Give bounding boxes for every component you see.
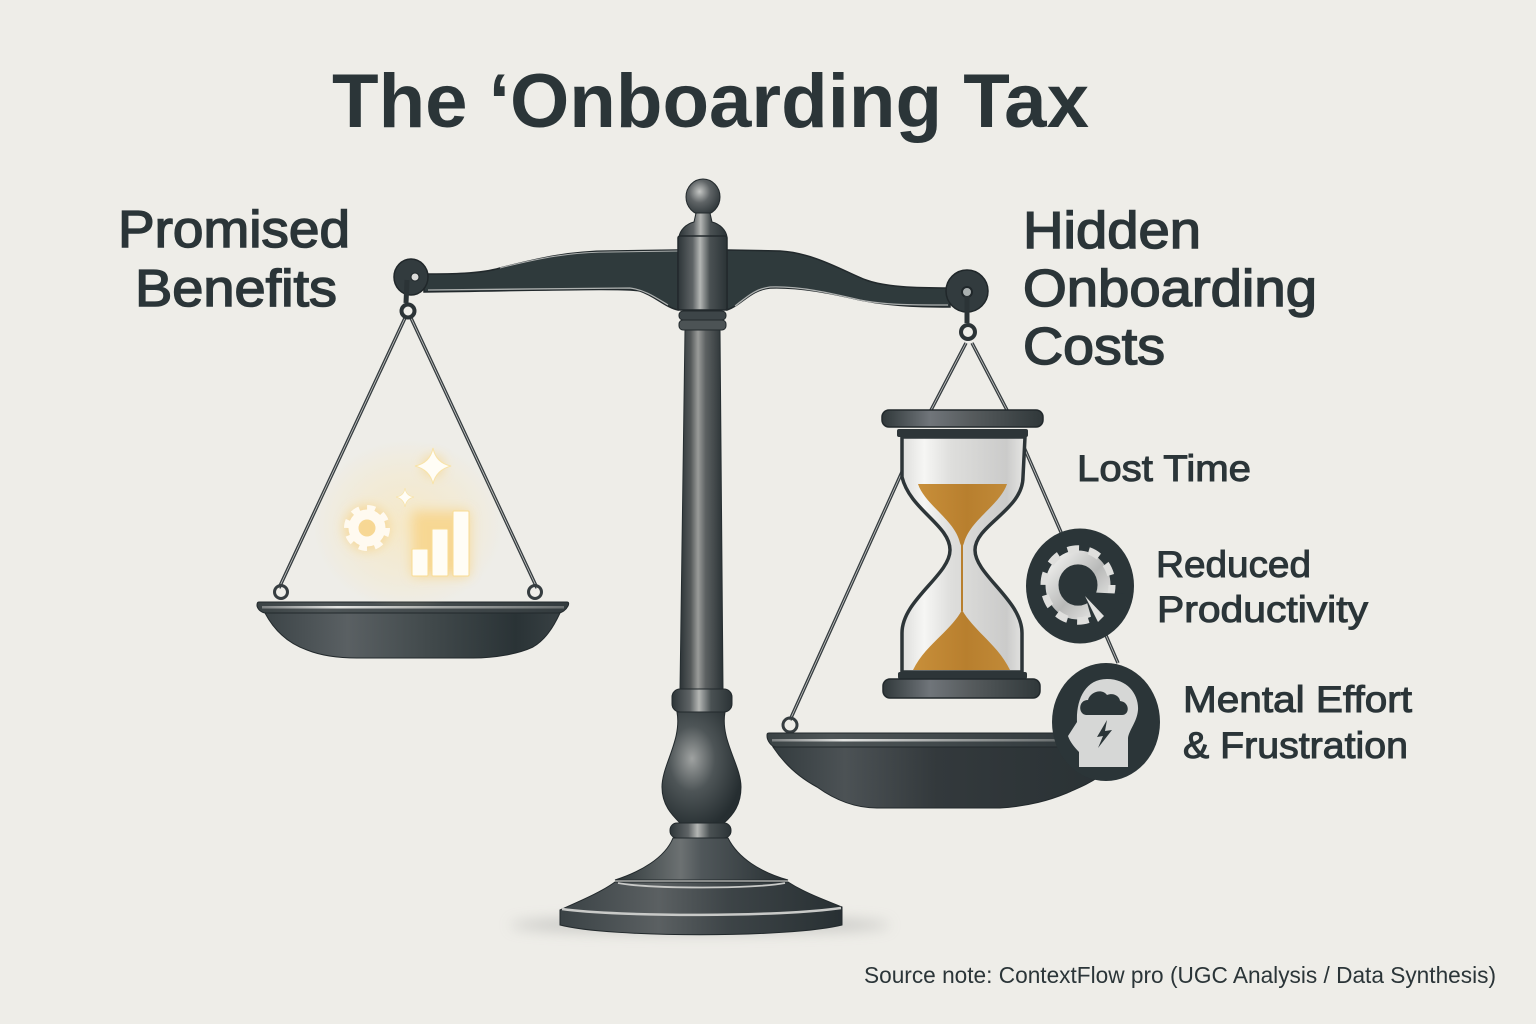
- bottom cap: [883, 672, 1040, 698]
- benefits glow icons: [313, 440, 503, 610]
- glass bulb: [902, 437, 1025, 672]
- heading: hidden onboarding costs: [1023, 202, 1317, 376]
- heading: hidden onboarding costs: Hidden: [1023, 202, 1201, 260]
- heading: promised benefits: Benefits: [135, 260, 337, 318]
- right pan strings: [783, 343, 1118, 732]
- top cap: [882, 410, 1043, 437]
- label: lost time: Lost Time: [1077, 448, 1251, 489]
- label: reduced productivity: Reduced: [1156, 544, 1311, 585]
- sand top: [918, 484, 1007, 548]
- sand bottom: [913, 610, 1010, 670]
- left pan strings: [274, 318, 542, 598]
- scale column: [680, 330, 723, 690]
- icon: large sparkle: [415, 448, 451, 484]
- right pan: [767, 733, 1100, 808]
- scale base: [560, 689, 842, 935]
- sand stream: [961, 543, 963, 611]
- label: mental effort and frustration: Mental Effort: [1183, 679, 1413, 720]
- left pan: [257, 602, 569, 658]
- label: mental effort and frustration: [1183, 679, 1413, 766]
- right pivot: [946, 270, 988, 339]
- icon: small sparkle: [396, 488, 414, 507]
- heading: promised benefits: Promised: [118, 201, 350, 259]
- column collar and finial: [678, 179, 727, 330]
- icon: head badge: [1052, 663, 1160, 781]
- source note: Source note: ContextFlow pro (UGC Analysis / Data Synthesis): [864, 962, 1496, 988]
- hourglass: [882, 410, 1043, 698]
- icon: gear badge: [1026, 528, 1134, 644]
- label: reduced productivity: Productivity: [1157, 589, 1369, 630]
- icon glow halo: [345, 456, 469, 576]
- left pivot: [394, 259, 428, 318]
- icon: gear: [347, 508, 387, 548]
- scale beam: [424, 250, 950, 310]
- glow: [313, 440, 503, 610]
- base floor shadow: [510, 917, 890, 933]
- heading: hidden onboarding costs: Costs: [1023, 318, 1165, 376]
- label: mental effort and frustration: & Frustration: [1183, 725, 1408, 766]
- label: reduced productivity: [1156, 544, 1369, 630]
- heading: hidden onboarding costs: Onboarding: [1023, 260, 1317, 318]
- icon: bar chart: [412, 511, 469, 576]
- heading: promised benefits: [118, 201, 350, 318]
- title: The ‘Onboarding Tax: [332, 59, 1089, 144]
